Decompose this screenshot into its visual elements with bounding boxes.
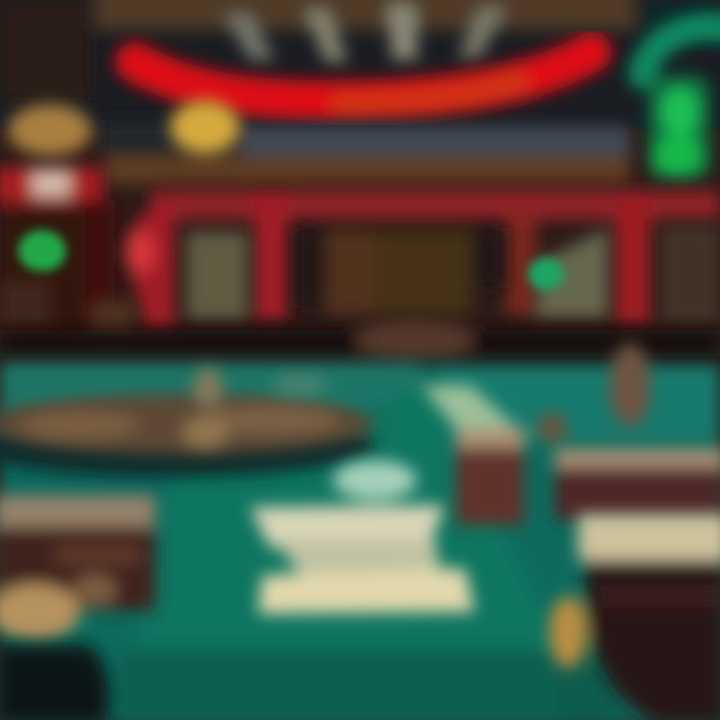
left stack of chips bbox=[0, 495, 155, 640]
left red and white awning bbox=[0, 167, 115, 335]
angled pale card and brown chip stack bbox=[420, 385, 567, 525]
red facade band and columns bbox=[125, 190, 720, 330]
red arched sign bbox=[135, 52, 592, 104]
green neon sign, top right bbox=[642, 27, 720, 180]
right front stack of chips bbox=[549, 514, 720, 720]
left green light bbox=[18, 230, 66, 272]
wheel shadow bbox=[0, 413, 375, 477]
far right figure bbox=[610, 343, 650, 427]
roulette wheel bbox=[0, 368, 375, 477]
right green light bbox=[528, 258, 564, 290]
wheel rim bbox=[0, 394, 375, 454]
playing cards pile bbox=[250, 460, 475, 614]
grey-blue and brown building bands bbox=[100, 120, 630, 184]
bottom left dark foreground bbox=[0, 645, 110, 720]
green casino table bbox=[0, 362, 720, 720]
facade doors and windows bbox=[0, 225, 720, 345]
dark floor line and central step bbox=[0, 320, 720, 360]
right stack of chips bbox=[555, 448, 720, 520]
yellow and tan lamps bbox=[8, 100, 240, 156]
ceiling: warm top band and teeth stripes bbox=[0, 0, 720, 100]
wheel highlights bbox=[20, 368, 340, 448]
